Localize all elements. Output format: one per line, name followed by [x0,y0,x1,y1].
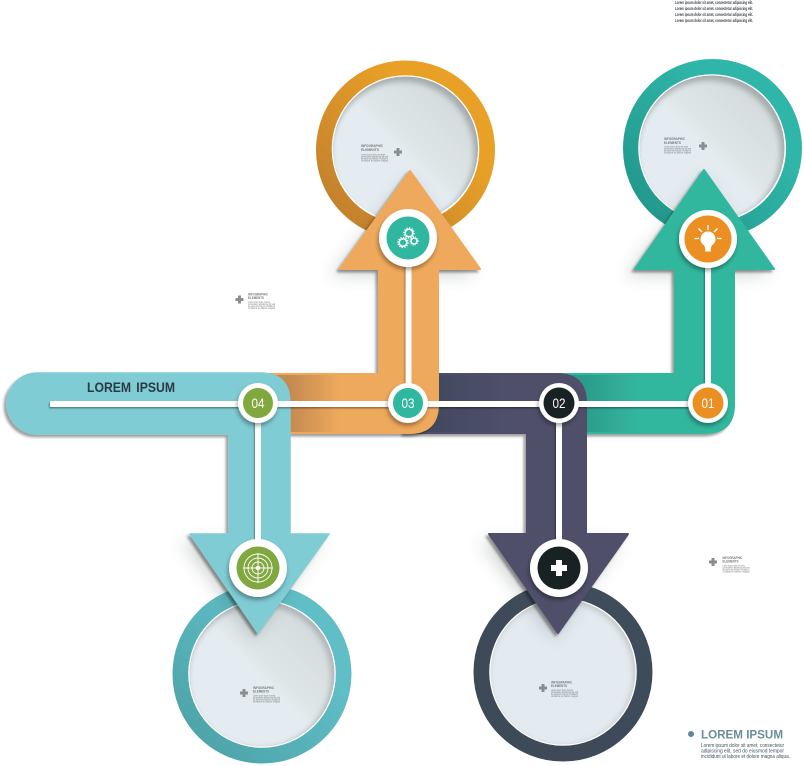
text block: free label left: do eiusmod tempor incididunt [248,304,275,308]
icon: target [229,539,287,597]
text block: teal circle label: Lorem ipsum dolor sit amet [664,144,688,148]
text block: teal circle label: ELEMENTS [664,141,682,145]
text block: free label right: INFOGRAPHIC [722,556,743,560]
node: 02: 02 [552,395,566,411]
text block: teal circle label [664,137,707,154]
text block: free label right: ELEMENTS [722,560,739,564]
text block: free label right: do eiusmod tempor incididunt [722,568,750,572]
text block: orange circle label: INFOGRAPHIC [361,144,383,148]
text block: teal circle label: do eiusmod tempor incididunt [664,148,691,152]
top caption text: Lorem ipsum dolor sit amet, consectetur adipiscing elit. [675,12,753,17]
text block: dark circle label: INFOGRAPHIC [551,680,572,684]
text block: light blue circle label: INFOGRAPHIC [253,686,274,690]
text block: dark circle label: do eiusmod tempor incididunt [551,692,578,696]
text block: teal circle label: INFOGRAPHIC [664,137,685,141]
text block: orange circle label: ut labore et dolore magna [361,158,389,162]
node: 03: 03 [402,395,415,411]
text block: orange circle label: ELEMENTS [361,148,380,152]
icon: gears [379,209,437,267]
text block: free label right [709,556,750,574]
top caption text: Lorem ipsum dolor sit amet, consectetur adipiscing elit. [675,6,753,11]
icon: light bulb [679,210,737,268]
connector lines [50,238,711,568]
text block: free label right: ut labore et dolore magna [722,570,750,574]
arrow: light blue down [7,373,329,633]
arrow: orange up [255,171,480,433]
text block: free label left: ut labore et dolore magna [248,306,276,310]
text block: dark circle label: ELEMENTS [551,684,568,688]
node: 04: 04 [252,395,265,411]
text block: teal circle label: ut labore et dolore magna [664,150,692,154]
arrow: dark down [405,374,628,633]
text block: teal circle label: consectetur adipiscing elit sed [664,146,691,150]
top caption text [675,0,753,23]
node: 02 [539,383,579,423]
arrow: green up [540,170,774,433]
text block: dark circle label: consectetur adipiscing elit sed [551,690,578,694]
text block: free label right: Lorem ipsum dolor sit amet [722,564,745,568]
top caption text: Lorem ipsum dolor sit amet, consectetur adipiscing elit. [675,18,753,23]
node: 04 [238,383,278,423]
top caption text: Lorem ipsum dolor sit amet, consectetur adipiscing elit. [675,0,753,5]
callout: lorem ipsum bottom right [688,728,790,760]
text block: free label left: INFOGRAPHIC [248,292,268,296]
text block: orange circle label: do eiusmod tempor incididunt [361,156,388,160]
panel: light blue circle [180,592,344,756]
text block: light blue circle label: Lorem ipsum dolor sit amet [253,694,275,698]
panel: teal circle [631,67,794,230]
text block: light blue circle label [240,686,281,704]
node: 01 [688,383,728,423]
callout: lorem ipsum bottom right: adipiscing elit, sed do eiusmod tempor [701,748,784,754]
text block: orange circle label [361,144,402,162]
text block: dark circle label: ut labore et dolore magna [551,694,579,698]
callout: lorem ipsum bottom right: incididunt ut labore et dolore magna aliqua. [701,754,790,760]
text block: orange circle label: Lorem ipsum dolor sit amet [361,152,385,156]
text block: dark circle label: Lorem ipsum dolor sit amet [551,688,573,692]
panel: dark circle [482,590,644,754]
text block: light blue circle label: do eiusmod tempor incididunt [253,698,280,702]
text block: dark circle label [539,680,579,698]
node: 03 [388,383,428,423]
icon: plus [530,539,588,597]
text block: free label left: Lorem ipsum dolor sit amet [248,300,270,304]
node: 01: 01 [702,395,715,411]
text block: orange circle label: consectetur adipiscing elit sed [361,154,388,158]
text block: free label left: consectetur adipiscing elit sed [248,302,275,306]
text block: light blue circle label: ELEMENTS [253,690,270,694]
text block: free label right: consectetur adipiscing elit sed [722,566,750,570]
panel: orange circle [324,68,487,232]
text block: light blue circle label: ut labore et dolore magna [253,700,281,704]
callout: lorem ipsum bottom right: LOREM IPSUM [701,728,783,742]
text block: free label left: ELEMENTS [248,296,265,300]
callout: lorem ipsum bottom right: Lorem ipsum dolor sit amet, consectetur [701,743,784,749]
text block: free label left [236,292,276,310]
heading: lorem ipsum on band: LOREM IPSUM [87,380,175,395]
text block: light blue circle label: consectetur adipiscing elit sed [253,696,280,700]
